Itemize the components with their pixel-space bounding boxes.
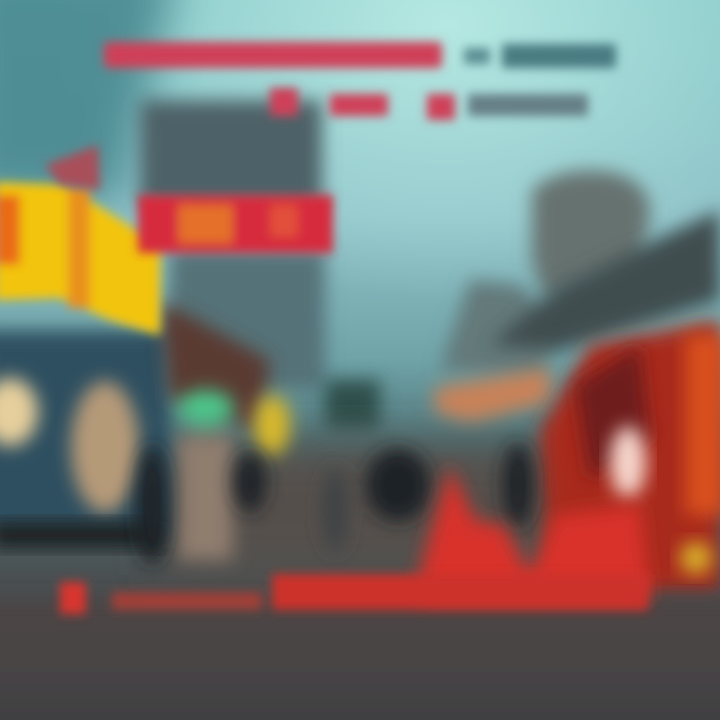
bottom blurred caption xyxy=(60,574,648,614)
ground xyxy=(0,600,720,720)
street middle ground xyxy=(160,445,560,575)
red banner sign xyxy=(138,195,333,253)
yellow sign xyxy=(0,182,160,335)
right roof xyxy=(490,210,720,350)
red flag xyxy=(45,145,100,190)
right tower xyxy=(532,170,650,300)
icon: white lantern glow xyxy=(610,426,646,498)
left building xyxy=(140,100,325,390)
icon: yellow lamp xyxy=(680,542,712,574)
left storefront xyxy=(0,300,270,548)
red spill shapes xyxy=(420,465,650,600)
icon: arched window xyxy=(71,381,139,513)
headline blurred line 2 xyxy=(270,88,588,120)
headline blurred line 1 xyxy=(104,42,616,68)
mid distance buildings xyxy=(325,280,560,430)
right red storefront xyxy=(540,320,720,590)
orange awning xyxy=(435,368,550,422)
icon: round window left xyxy=(0,378,38,446)
green and yellow lights xyxy=(178,390,290,560)
pedestrians xyxy=(136,443,533,565)
